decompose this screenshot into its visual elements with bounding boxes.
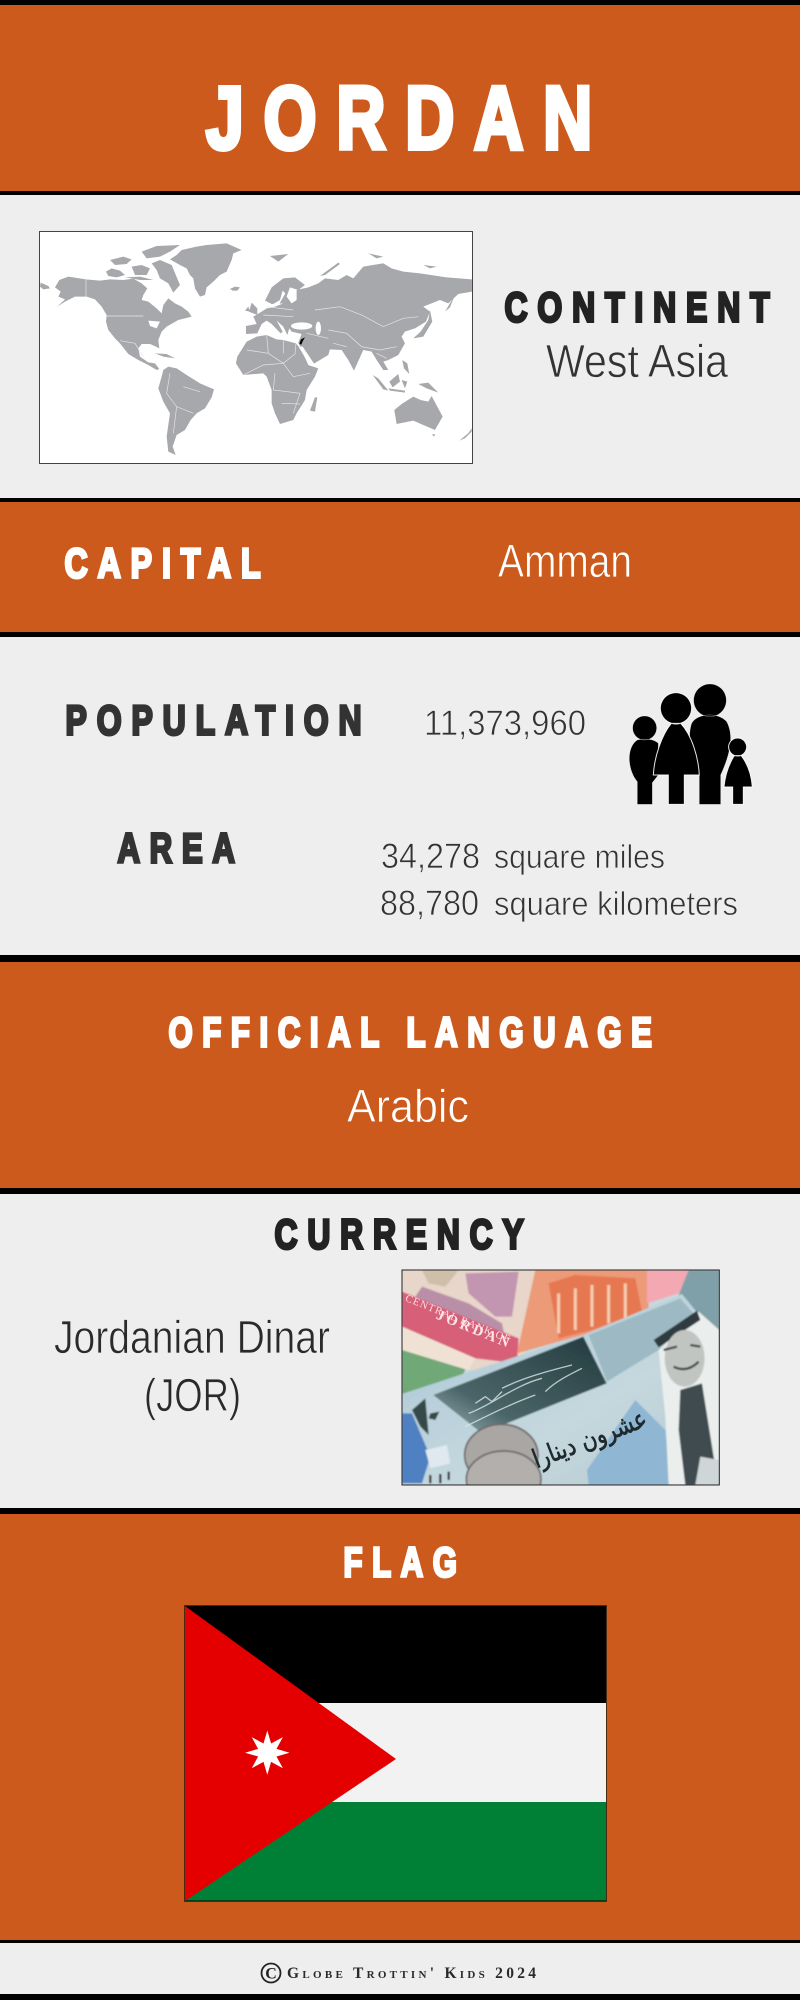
map: north america	[55, 277, 192, 370]
photo: portrait	[659, 1312, 719, 1485]
footer text: Globe Trottin' Kids 2024	[287, 1965, 539, 1982]
population value: 11,373,960	[424, 704, 586, 743]
photo: coins	[463, 1422, 540, 1470]
icon: copyright	[262, 1964, 280, 1982]
photo: orange note	[517, 1270, 649, 1353]
photo: blue corner	[402, 1413, 430, 1483]
map: australia	[394, 396, 443, 430]
flag star	[245, 1730, 290, 1775]
area miles: 34,278	[381, 837, 480, 876]
map: eurasia	[246, 263, 472, 371]
map: islands	[413, 310, 432, 338]
map: africa	[236, 335, 318, 424]
area label: AREA	[118, 824, 244, 872]
photo: numeral	[412, 1398, 439, 1435]
map: inland waters	[148, 291, 321, 366]
icon: copyright: C	[265, 1966, 277, 1982]
area miles	[381, 837, 665, 876]
currency value: (JOR)	[144, 1369, 241, 1421]
continent value: West Asia	[546, 335, 728, 387]
banknote photo	[402, 1270, 719, 1508]
photo: mosque	[587, 1400, 672, 1485]
currency label: CURRENCY	[274, 1210, 534, 1258]
population label: POPULATION	[66, 696, 372, 744]
panel: title band	[0, 0, 800, 195]
world map	[40, 232, 472, 464]
area kilometers: square kilometers	[494, 885, 738, 922]
banknote photo: CENTRAL BANK OF	[404, 1293, 511, 1345]
area kilometers	[380, 884, 738, 923]
map: south america	[158, 367, 214, 455]
panel: continent	[0, 195, 800, 498]
area kilometers: 88,780	[380, 884, 479, 923]
photo: dark band	[433, 1337, 607, 1433]
panel: official language	[0, 955, 800, 1194]
banknote photo: عشرون دينارا	[528, 1404, 651, 1475]
panel: flag	[0, 1508, 800, 1943]
panel: capital	[0, 498, 800, 637]
currency value: Jordanian Dinar	[54, 1311, 330, 1363]
map: greenland	[170, 243, 242, 297]
panel: population and area	[0, 637, 800, 955]
flag label: FLAG	[344, 1538, 466, 1586]
flag of Jordan	[184, 1606, 606, 1902]
capital value: Amman	[498, 535, 632, 587]
currency value	[54, 1311, 330, 1421]
capital label: CAPITAL	[64, 540, 270, 586]
area miles: square miles	[494, 838, 665, 875]
language value: Arabic	[347, 1080, 469, 1132]
icon: family	[629, 684, 752, 804]
map: canadian arctic	[106, 268, 125, 277]
photo: blue note	[402, 1294, 719, 1485]
photo: engraved lines	[465, 1365, 582, 1427]
map: Jordan marker	[299, 337, 305, 345]
photo: green note	[402, 1350, 465, 1394]
title: JORDAN	[206, 68, 612, 168]
panel: footer	[0, 1943, 800, 2000]
map: chukotka edge	[40, 283, 50, 289]
photo: ticks	[430, 1472, 449, 1483]
photo: pink note	[402, 1270, 549, 1370]
banknote photo: JORDAN	[434, 1307, 514, 1352]
panel: currency	[55, 1218, 720, 1486]
